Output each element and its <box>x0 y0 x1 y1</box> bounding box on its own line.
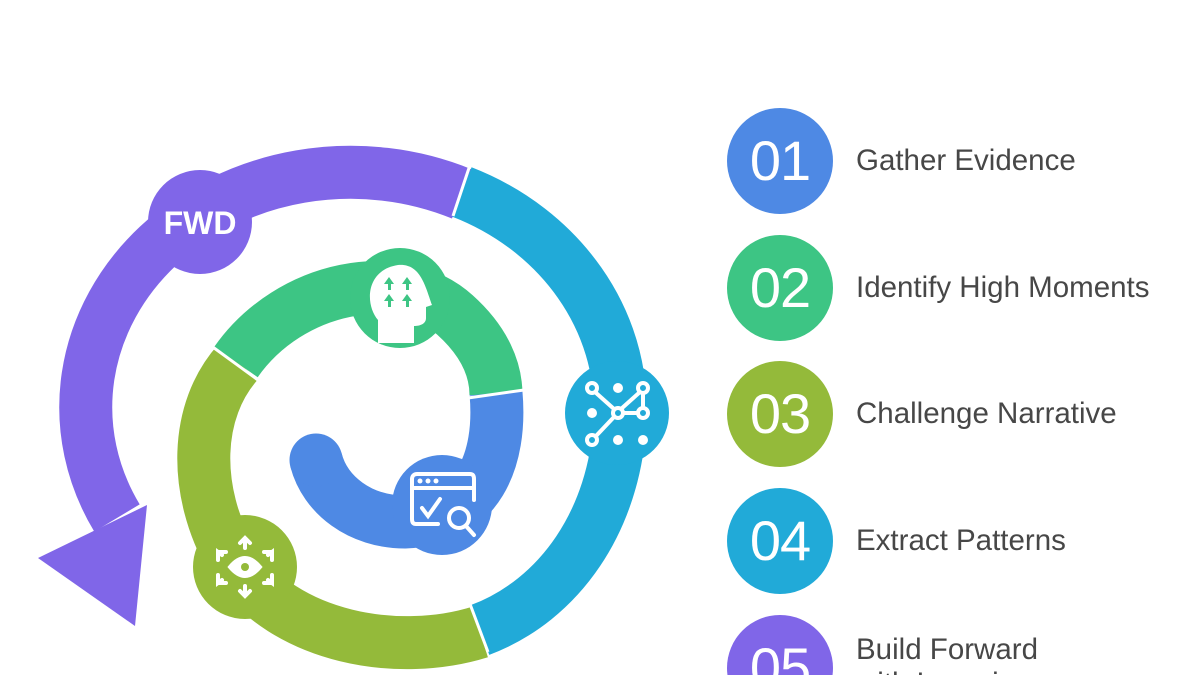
step 04 <box>727 488 1066 594</box>
step 03: 03 <box>750 382 810 445</box>
icon: search checklist <box>392 455 492 555</box>
spiral diagram <box>38 146 669 670</box>
icon: eye with arrows <box>193 515 297 619</box>
arc: green <box>236 288 496 395</box>
arc: purple outer with arrow <box>38 172 462 626</box>
step 03 <box>727 361 1117 467</box>
step 04: Extract Patterns <box>856 524 1066 557</box>
step 05 <box>727 615 1046 675</box>
step 02 <box>727 235 1150 341</box>
icon: FWD <box>148 170 252 274</box>
icon: network <box>565 361 669 465</box>
step 03: Challenge Narrative <box>856 397 1117 430</box>
step 01: Gather Evidence <box>856 144 1076 177</box>
step 01: 01 <box>750 129 810 192</box>
step 02: Identify High Moments <box>856 271 1150 304</box>
icon: head with arrows <box>350 248 450 348</box>
icon: FWD: FWD <box>164 205 236 241</box>
step 05: Build Forward <box>856 633 1038 666</box>
step 04: 04 <box>750 509 810 572</box>
arc: blue inner <box>290 393 497 522</box>
arc: olive <box>204 362 480 643</box>
step 02: 02 <box>750 256 810 319</box>
step 01 <box>727 108 1076 214</box>
arc: blue outer <box>462 192 620 630</box>
